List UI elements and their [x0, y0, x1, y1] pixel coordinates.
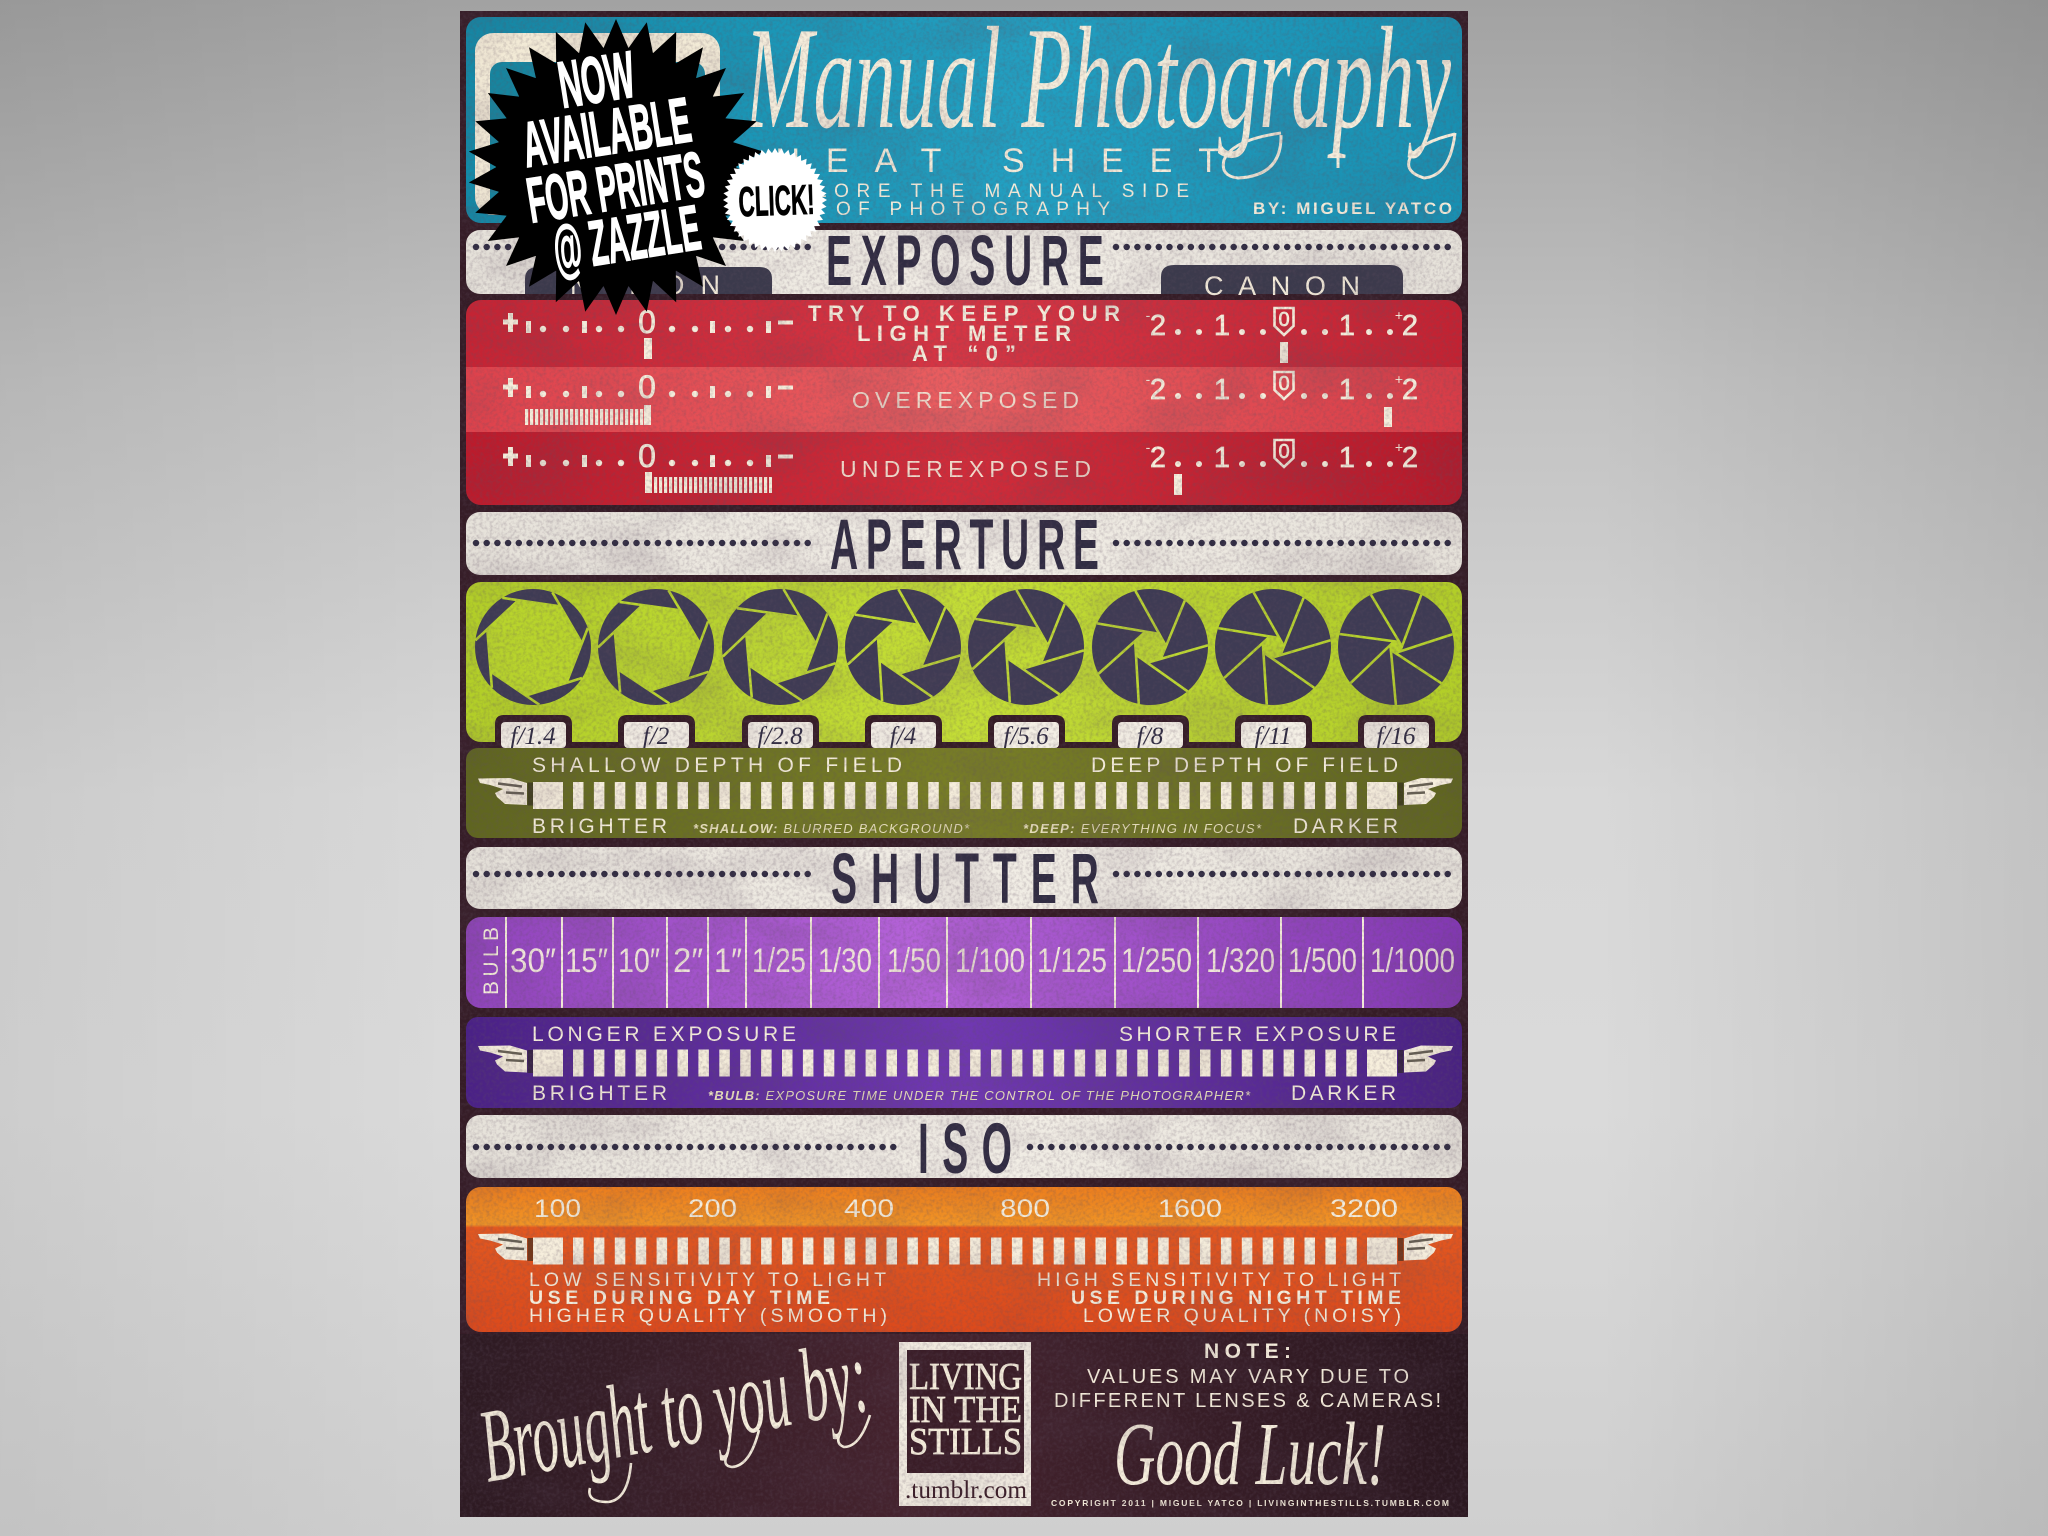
canon meter: overexposed: 1 — [1339, 374, 1355, 406]
iso values — [534, 1195, 1398, 1223]
label: shallow depth of field: SHALLOW DEPTH OF FIELD — [532, 754, 902, 777]
panel: iso header — [466, 1110, 1462, 1189]
iris: f/1.4 — [469, 580, 600, 710]
canon meter: underexposed: 1 — [1214, 442, 1230, 474]
tab: f/5.6 — [988, 715, 1065, 750]
label: brighter: BRIGHTER — [532, 815, 667, 838]
canon meter: underexposed: 2 — [1402, 442, 1418, 474]
label: overexposed: OVEREXPOSED — [852, 387, 1079, 413]
tab: f/11: f/11 — [1254, 723, 1292, 750]
canon meter: overexposed: - — [1146, 371, 1151, 387]
tagline: OF PHOTOGRAPHY — [836, 199, 1110, 220]
canon meter: overexposed: 0 — [1278, 373, 1290, 395]
panel: footer — [460, 1317, 1468, 1517]
panel: exposure length scale — [466, 1017, 1462, 1108]
shutter speed labels: 1/100 — [955, 942, 1025, 980]
script: brought to you by — [471, 1317, 877, 1505]
label: shorter exposure: SHORTER EXPOSURE — [1119, 1023, 1396, 1046]
canon meter: overexposed: + — [1395, 371, 1403, 387]
canon meter: correct exposure — [1146, 307, 1418, 363]
high iso text — [1037, 1269, 1401, 1327]
canon meter: correct exposure: 1 — [1214, 310, 1230, 342]
shutter speed labels: 1/30 — [818, 942, 872, 980]
low iso text: HIGHER QUALITY (SMOOTH) — [529, 1305, 887, 1327]
shutter speed labels: 1/500 — [1288, 942, 1357, 980]
shutter speed labels: 10″ — [618, 942, 660, 980]
canon meter: correct exposure: 1 — [1339, 310, 1355, 342]
badge: click — [705, 130, 845, 270]
note: deep: *DEEP: EVERYTHING IN FOCUS* — [1023, 821, 1262, 836]
low iso text — [529, 1269, 887, 1327]
center text: keep meter at zero — [808, 301, 1120, 366]
tab: f/8 — [1112, 715, 1189, 750]
canon meter: correct exposure: 2 — [1150, 310, 1166, 342]
nikon meter: correct exposure — [503, 304, 793, 359]
center text: keep meter at zero: AT “0” — [912, 341, 1016, 366]
iris: f/8 — [1092, 589, 1208, 705]
label: bulb: BULB — [480, 927, 503, 995]
canon meter: underexposed: - — [1146, 439, 1151, 455]
script: brought to you by: Brought to you by: — [471, 1317, 877, 1505]
high iso text: USE DURING NIGHT TIME — [1071, 1287, 1401, 1309]
high iso text: HIGH SENSITIVITY TO LIGHT — [1037, 1269, 1401, 1291]
title: Manual Photography — [744, 0, 1451, 159]
shutter speed labels: 1/250 — [1121, 942, 1192, 980]
tab: f/2.8: f/2.8 — [757, 723, 803, 750]
tab: f/4: f/4 — [890, 723, 916, 750]
note: VALUES MAY VARY DUE TO — [1087, 1366, 1409, 1388]
canon meter: overexposed — [1146, 371, 1418, 427]
shutter speed labels — [510, 942, 1455, 980]
nikon meter: correct exposure: 0 — [638, 304, 656, 340]
label: brighter: BRIGHTER — [532, 1082, 667, 1105]
iso values: 800 — [1000, 1195, 1050, 1223]
badge: now available for prints: @ ZAZZLE — [548, 191, 705, 285]
shutter speed labels: 30″ — [510, 942, 556, 980]
badge: now available for prints — [424, 0, 823, 360]
canon meter: underexposed: 2 — [1150, 442, 1166, 474]
iso values: 400 — [844, 1195, 894, 1223]
nikon meter: underexposed: 0 — [638, 438, 656, 474]
label: darker: DARKER — [1293, 815, 1398, 838]
canon meter: underexposed: + — [1395, 439, 1403, 455]
note: DIFFERENT LENSES & CAMERAS! — [1054, 1390, 1441, 1412]
panel: title banner — [466, 0, 1462, 223]
iris: f/5.6 — [968, 589, 1084, 705]
note: shallow: *SHALLOW: BLURRED BACKGROUND* — [693, 821, 970, 836]
panel: depth of field scale — [466, 748, 1462, 838]
logo: living in the stills — [899, 1342, 1031, 1506]
shutter speed labels: 1/25 — [752, 942, 806, 980]
iris: f/11 — [1215, 589, 1331, 705]
tab: f/16: f/16 — [1377, 723, 1416, 750]
nikon meter: overexposed: 0 — [638, 369, 656, 405]
scale bar with pointing hands — [478, 778, 1453, 809]
center text: keep meter at zero: TRY TO KEEP YOUR — [808, 301, 1120, 326]
tab: f/16 — [1358, 715, 1435, 750]
nikon meter: underexposed — [503, 438, 793, 493]
canon meter: overexposed: 1 — [1214, 374, 1230, 406]
shutter speed labels: 1″ — [714, 942, 742, 980]
iso values: 100 — [534, 1195, 581, 1223]
tab: canon: CANON — [1204, 271, 1360, 301]
canon meter: overexposed: 2 — [1150, 374, 1166, 406]
heading: aperture: APERTURE — [830, 506, 1099, 585]
shutter speed labels: 1/125 — [1037, 942, 1107, 980]
iris: f/2 — [598, 587, 716, 705]
label: deep depth of field: DEEP DEPTH OF FIELD — [1091, 754, 1398, 777]
copyright: COPYRIGHT 2011 | MIGUEL YATCO | LIVINGINTHESTILLS.TUMBLR.COM — [1051, 1498, 1449, 1508]
label: darker: DARKER — [1291, 1082, 1396, 1105]
center text: keep meter at zero: LIGHT METER — [857, 321, 1071, 346]
heading: shutter: SHUTTER — [831, 840, 1099, 919]
canon meter: overexposed: 2 — [1402, 374, 1418, 406]
scale bar with pointing hands — [478, 1234, 1453, 1264]
title — [744, 0, 1455, 178]
iris: f/16 — [1338, 589, 1454, 705]
low iso text: USE DURING DAY TIME — [529, 1287, 830, 1309]
label: underexposed: UNDEREXPOSED — [840, 456, 1091, 482]
tagline — [755, 181, 1189, 220]
tab: nikon — [525, 267, 772, 300]
tagline: EXPLORE THE MANUAL SIDE — [755, 181, 1189, 202]
shutter speed labels: 1/50 — [887, 942, 941, 980]
heading: exposure: EXPOSURE — [826, 222, 1104, 301]
note — [1054, 1340, 1441, 1412]
tab: f/2: f/2 — [643, 723, 669, 750]
iris: f/4 — [845, 589, 961, 705]
panel: exposure meters — [466, 300, 1462, 505]
canon meter: underexposed: 0 — [1278, 441, 1290, 463]
tab: nikon: NIKON — [570, 270, 720, 300]
shutter speed labels: 1/1000 — [1370, 942, 1455, 980]
panel: shutter speeds — [466, 917, 1462, 1008]
low iso text: LOW SENSITIVITY TO LIGHT — [529, 1269, 886, 1291]
panel: exposure header — [466, 222, 1462, 301]
canon meter: correct exposure: - — [1146, 307, 1151, 323]
badge: now available for prints: AVAILABLE — [517, 83, 696, 181]
note: bulb definition: *BULB: EXPOSURE TIME UNDER THE CONTROL OF THE PHOTOGRAPHER* — [708, 1088, 1251, 1103]
script: good luck: Good Luck! — [1114, 1405, 1386, 1504]
shutter speed labels: 1/320 — [1206, 942, 1275, 980]
high iso text: LOWER QUALITY (NOISY) — [1083, 1305, 1401, 1327]
iso values: 200 — [688, 1195, 737, 1223]
canon meter: correct exposure: + — [1395, 307, 1403, 323]
tab: f/1.4: f/1.4 — [510, 723, 556, 750]
tab: f/4 — [865, 715, 942, 750]
logo: living in the stills: STILLS — [909, 1421, 1022, 1463]
iris: f/2.8 — [722, 589, 838, 705]
tab: canon — [1161, 265, 1403, 301]
badge: now available for prints: FOR PRINTS — [522, 138, 709, 237]
tab: f/5.6: f/5.6 — [1003, 723, 1049, 750]
subtitle: cheat sheet: CHEAT SHEET — [725, 142, 1219, 180]
badge: now available for prints: NOW — [553, 37, 640, 122]
heading: iso: ISO — [918, 1110, 1012, 1189]
panel: iso scale — [466, 1187, 1462, 1332]
panel: aperture irises — [466, 580, 1462, 742]
label: longer exposure: LONGER EXPOSURE — [532, 1023, 796, 1046]
tab: f/2.8 — [742, 715, 819, 750]
icon: camera — [475, 33, 720, 215]
panel: shutter header — [466, 840, 1462, 919]
badge: click: CLICK! — [738, 176, 815, 225]
tab: f/8: f/8 — [1137, 723, 1164, 750]
tab: f/11 — [1235, 715, 1312, 750]
panel: aperture header — [466, 506, 1462, 585]
iso values: 1600 — [1158, 1195, 1222, 1223]
byline: BY: MIGUEL YATCO — [1253, 199, 1452, 218]
logo: living in the stills: IN THE — [909, 1389, 1022, 1431]
tab: f/2 — [618, 715, 695, 750]
canon meter: underexposed: 1 — [1339, 442, 1355, 474]
note: NOTE: — [1204, 1340, 1291, 1363]
canon meter: underexposed — [1146, 439, 1418, 495]
tab: f/1.4 — [495, 715, 572, 750]
logo: living in the stills: .tumblr.com — [905, 1477, 1028, 1504]
logo: living in the stills: LIVING — [909, 1356, 1022, 1398]
canon meter: correct exposure: 2 — [1402, 310, 1418, 342]
nikon meter: overexposed — [503, 369, 793, 425]
scale bar with pointing hands — [478, 1046, 1453, 1076]
iso values: 3200 — [1330, 1195, 1398, 1223]
shutter speed labels: 2″ — [673, 942, 703, 980]
canon meter: correct exposure: 0 — [1278, 309, 1290, 331]
f-stop tabs — [495, 715, 1435, 750]
poster — [460, 0, 1468, 1517]
shutter speed labels: 15″ — [565, 942, 608, 980]
